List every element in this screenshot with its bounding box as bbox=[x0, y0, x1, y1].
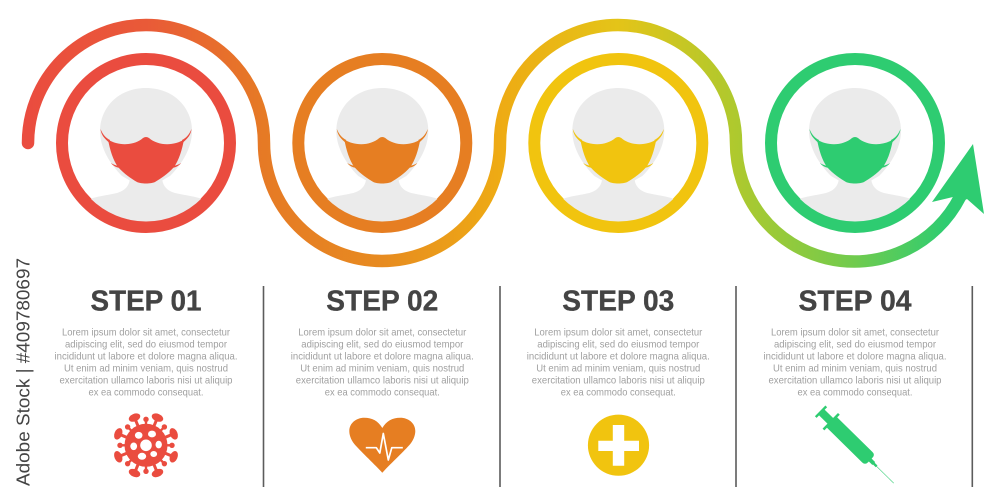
icon: heart with pulse bbox=[349, 418, 415, 473]
text block: step 01 bbox=[54, 327, 238, 399]
text block: step 04: Ut enim ad minim veniam, quis nostrud bbox=[773, 363, 937, 375]
watermark: diagonal pattern: Adobe bbox=[497, 181, 560, 244]
text block: step 01: Lorem ipsum dolor sit amet, consectetur bbox=[62, 327, 230, 339]
text block: step 03: Ut enim ad minim veniam, quis nostrud bbox=[536, 363, 700, 375]
text block: step 01: exercitation ullamco laboris nisi ut aliquip bbox=[60, 375, 233, 387]
heading: step 02: STEP 02 bbox=[326, 286, 438, 318]
watermark: diagonal pattern: Adobe Stock bbox=[402, 176, 510, 284]
icon: virus bbox=[112, 412, 180, 479]
text block: step 02: ex ea commodo consequat. bbox=[325, 387, 440, 399]
text block: step 04: incididunt ut labore et dolore magna aliqua. bbox=[764, 351, 946, 363]
flow arrow bbox=[28, 25, 984, 262]
text block: step 01: incididunt ut labore et dolore magna aliqua. bbox=[54, 351, 238, 363]
panel: step 04 portrait bbox=[771, 59, 939, 227]
text block: step 04: Lorem ipsum dolor sit amet, consectetur bbox=[771, 327, 939, 339]
text block: step 02: incididunt ut labore et dolore magna aliqua. bbox=[291, 351, 474, 363]
watermark: diagonal pattern: Stock bbox=[237, 227, 294, 284]
icon: medical cross bbox=[588, 415, 649, 476]
watermark: diagonal pattern: Adobe Stock bbox=[567, 386, 675, 494]
heading: step 01: STEP 01 bbox=[90, 286, 202, 318]
watermark: diagonal pattern: Stock bbox=[887, 427, 944, 484]
text block: step 02: Ut enim ad minim veniam, quis nostrud bbox=[300, 363, 464, 375]
text block: step 04: adipiscing elit, sed do eiusmod tempor bbox=[774, 339, 936, 351]
text block: step 03: adipiscing elit, sed do eiusmod tempor bbox=[537, 339, 700, 351]
text block: step 03: ex ea commodo consequat. bbox=[561, 387, 676, 399]
text block: step 02: Lorem ipsum dolor sit amet, consectetur bbox=[298, 327, 467, 339]
text block: step 03: incididunt ut labore et dolore magna aliqua. bbox=[527, 351, 710, 363]
watermark: diagonal pattern: Adobe Stock bbox=[187, 376, 295, 484]
watermark: diagonal pattern: Adobe Stock bbox=[747, 391, 855, 499]
panel: step 02 portrait bbox=[298, 59, 466, 227]
panel: step 01 portrait bbox=[62, 59, 230, 227]
text block: step 04 bbox=[764, 327, 946, 399]
text block: step 01: adipiscing elit, sed do eiusmod tempor bbox=[65, 339, 227, 351]
heading: step 03: STEP 03 bbox=[562, 286, 674, 318]
text block: step 03: Lorem ipsum dolor sit amet, consectetur bbox=[534, 327, 703, 339]
watermark: diagonal pattern: Stock bbox=[607, 217, 664, 274]
watermark: diagonal pattern: Adobe Stock bbox=[397, 366, 505, 474]
text block: step 02: adipiscing elit, sed do eiusmod tempor bbox=[301, 339, 464, 351]
text block: step 02 bbox=[291, 327, 474, 399]
watermark: diagonal pattern: Adobe Stock bbox=[47, 336, 155, 444]
text block: step 03 bbox=[527, 327, 710, 399]
text block: step 04: exercitation ullamco laboris nisi ut aliquip bbox=[768, 375, 942, 387]
watermark: stock id: Adobe Stock | #409780697 bbox=[14, 258, 34, 486]
icon: syringe bbox=[812, 403, 901, 491]
text block: step 04: ex ea commodo consequat. bbox=[798, 387, 912, 399]
arrow head bbox=[932, 144, 984, 214]
text block: step 02: exercitation ullamco laboris nisi ut aliquip bbox=[296, 375, 469, 387]
panel: step 03 portrait bbox=[534, 59, 702, 227]
text block: step 01: Ut enim ad minim veniam, quis nostrud bbox=[64, 363, 228, 375]
text block: step 01: ex ea commodo consequat. bbox=[88, 387, 204, 399]
text block: step 03: exercitation ullamco laboris nisi ut aliquip bbox=[532, 375, 705, 387]
watermark: diagonal pattern: Adobe bbox=[732, 176, 795, 239]
heading: step 04: STEP 04 bbox=[798, 286, 912, 318]
